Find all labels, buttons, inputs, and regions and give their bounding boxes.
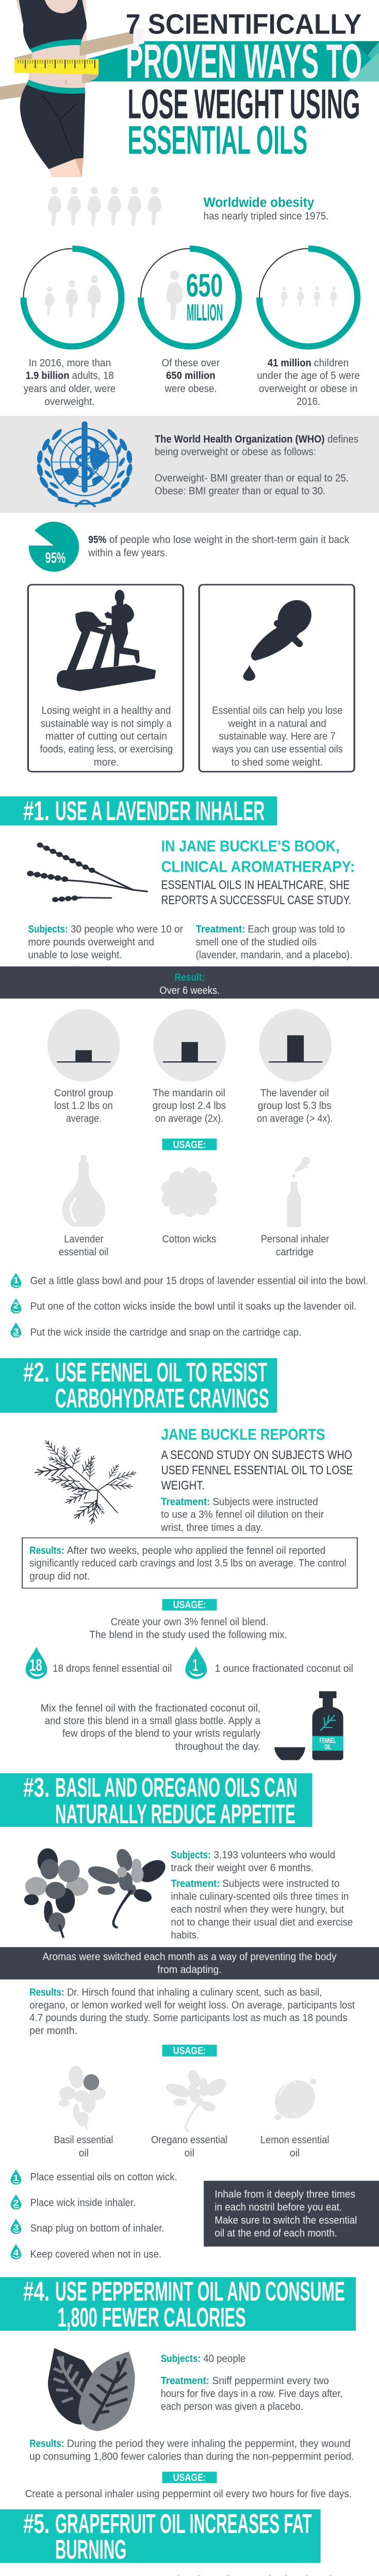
badge: usage: USAGE: xyxy=(173,1599,206,1611)
card text: Losing weight in a healthy and xyxy=(42,704,171,716)
subjects text: Subjects: xyxy=(28,923,68,935)
subjects and treatment text: Sniff peppermint every two xyxy=(212,2375,329,2386)
subjects and treatment text: track their weight over 6 months. xyxy=(171,1862,314,1873)
step 2: 2 xyxy=(13,1301,19,1310)
caption: obese: Of these over xyxy=(162,357,220,369)
subjects and treatment text: Treatment: xyxy=(161,2375,209,2386)
bar chart: control group xyxy=(47,1009,120,1124)
arm and skin xyxy=(15,0,87,94)
treatment text: to use a 3% fennel oil dilution on their xyxy=(161,1509,324,1520)
treatment text: wrist, three times a day. xyxy=(160,1521,263,1533)
caption: children: children xyxy=(314,357,349,369)
item: lemon essential oil: oil xyxy=(290,2147,300,2159)
tank top xyxy=(19,0,87,50)
worldwide obesity text xyxy=(204,195,329,222)
panel: fennel results: Results: xyxy=(29,1545,64,1556)
card text: more. xyxy=(94,756,119,768)
WHO text: defines xyxy=(327,433,358,445)
WHO text: The World Health Organization (WHO) xyxy=(155,433,325,445)
bar chart: lavender group: on average (> 4x). xyxy=(257,1112,333,1124)
treatment text xyxy=(160,1496,324,1533)
caption: obese: 650 million xyxy=(166,369,216,381)
heading banner #1 xyxy=(0,795,277,826)
item: basil essential oil: Basil essential xyxy=(54,2134,113,2146)
heading banner #4: #4. xyxy=(23,2276,50,2307)
caption: children: 2016. xyxy=(296,396,320,408)
caption: obese: were obese. xyxy=(164,383,217,394)
panel: losing weight card xyxy=(28,585,183,772)
bar chart: lavender group xyxy=(257,1009,333,1124)
subjects and treatment text: 40 people xyxy=(203,2352,245,2364)
card text xyxy=(212,704,343,768)
icon: peppermint leaves xyxy=(48,2348,135,2431)
ring chart: 41 million children xyxy=(259,248,357,346)
heading banner #3 xyxy=(0,1772,312,1829)
heading banner #4 xyxy=(0,2276,356,2333)
item: lavender essential oil bottle xyxy=(59,1155,108,1258)
bar chart: lavender group: The lavender oil xyxy=(260,1087,329,1099)
panel: aromas band xyxy=(0,1947,379,1979)
card text xyxy=(40,704,173,768)
caption: obese xyxy=(162,357,220,394)
results text: Results: xyxy=(29,2437,64,2449)
tape lower left xyxy=(0,82,28,100)
subheading: Jane Buckle book xyxy=(161,838,355,907)
icon: basil and oregano xyxy=(24,1848,170,1938)
ingredient: 18 drops fennel: 18 drops fennel essential oil xyxy=(53,1663,172,1674)
bar chart: mandarin group: group lost 2.4 lbs xyxy=(153,1099,226,1111)
item: cotton wicks xyxy=(161,1167,217,1245)
icon: fennel sprig xyxy=(33,1438,138,1524)
ribbon light triangle xyxy=(348,52,379,81)
ribbon mid triangle xyxy=(367,42,379,65)
treatment text: Subjects were instructed xyxy=(212,1496,318,1507)
card text: foods, eating less, or exercising xyxy=(40,743,173,755)
bar chart: control group: Control group xyxy=(54,1087,113,1099)
results text: Results: xyxy=(29,1986,64,1998)
subjects and treatment text: habits. xyxy=(171,1929,199,1941)
step 1: Place essential oils on cotton wick. xyxy=(30,2171,177,2183)
bar chart: mandarin group: on average (2x). xyxy=(155,1112,223,1124)
mixing instructions: few drops of the blend to your wrists regularly xyxy=(62,1727,260,1739)
ingredient: 18 drops fennel xyxy=(26,1647,172,1679)
item: lemon essential oil xyxy=(260,2075,329,2159)
thigh xyxy=(49,159,81,177)
caption: adults xyxy=(24,357,116,408)
thigh shade xyxy=(75,158,84,177)
caption: adults: overweight. xyxy=(44,396,95,408)
subjects and treatment text: Subjects: xyxy=(171,1849,211,1860)
caption: adults: adults, 18 xyxy=(72,369,114,381)
pie chart: 95% xyxy=(29,522,79,572)
badge: usage: USAGE: xyxy=(173,2471,206,2483)
caption: children xyxy=(257,357,360,408)
tape back strap upper xyxy=(14,31,135,61)
step 2 xyxy=(11,2194,136,2210)
statistic text: 95% regain: 95% xyxy=(88,534,106,546)
step 2 xyxy=(11,1298,356,1314)
item: personal inhaler cartridge xyxy=(261,1155,329,1258)
ring chart: 650 million obese: 650 xyxy=(186,267,223,303)
panel: WHO definition xyxy=(0,416,379,513)
panel: inhale callout: oil at the end of each month. xyxy=(215,2227,337,2239)
treatment text xyxy=(196,923,352,961)
treatment text: Each group was told to xyxy=(248,923,345,935)
item: lemon essential oil: Lemon essential xyxy=(260,2134,329,2146)
panel: inhale callout xyxy=(204,2181,379,2247)
subjects text xyxy=(28,923,183,961)
card text: Essential oils can help you lose xyxy=(212,704,342,716)
worldwide obesity text: has nearly tripled since 1975. xyxy=(204,210,329,222)
yellow tape xyxy=(14,59,98,74)
subjects text: 30 people who were 10 or xyxy=(71,923,183,935)
icon: treadmill runner xyxy=(57,590,156,691)
caption: adults: years and older, were xyxy=(24,383,116,394)
results text xyxy=(29,1986,355,2037)
item: personal inhaler cartridge: Personal inhaler xyxy=(261,1233,329,1245)
icon: dropper and drop xyxy=(243,594,318,681)
bar chart: control group: lost 1.2 lbs on xyxy=(54,1099,113,1111)
mixing instructions: Mix the fennel oil with the fractionated coconut oil, xyxy=(41,1702,260,1714)
step 3 xyxy=(11,2218,164,2234)
steps: inhaler xyxy=(11,2169,177,2260)
bar chart: control group: average. xyxy=(66,1112,102,1124)
step 4 xyxy=(11,2244,161,2260)
ingredient: 1 ounce coconut oil xyxy=(186,1647,353,1679)
heading banner #3: #3. xyxy=(23,1772,50,1803)
step 1: 1 xyxy=(13,2174,19,2183)
panel: result band xyxy=(0,967,379,998)
mixing instructions xyxy=(41,1702,261,1752)
item: oregano essential oil: Oregano essential xyxy=(151,2134,227,2146)
fennel blend intro xyxy=(89,1616,287,1640)
step 3: Put the wick inside the cartridge and snap on the cartridge cap. xyxy=(30,1326,302,1338)
fennel blend intro: Create your own 3% fennel oil blend. xyxy=(111,1616,268,1628)
tape ticks xyxy=(25,60,95,68)
step 1 xyxy=(11,2169,177,2184)
panel: essential oils card xyxy=(199,585,354,772)
heading banner #5: BURNING xyxy=(55,2534,126,2565)
card text: weight in a natural and xyxy=(228,718,326,729)
item: oregano essential oil: oil xyxy=(185,2147,194,2159)
tape fine ticks xyxy=(18,60,92,63)
teal ribbon xyxy=(87,41,379,81)
results text xyxy=(29,2437,354,2462)
ribbon dark triangle xyxy=(352,41,379,56)
item: oregano essential oil xyxy=(151,2069,230,2159)
WHO text: Obese: BMI greater than or equal to 30. xyxy=(155,485,325,497)
icon: WHO logo xyxy=(36,421,133,507)
navel xyxy=(65,80,67,84)
panel: inhale callout: in each nostril before you eat. xyxy=(215,2201,342,2213)
lower waistband xyxy=(27,80,85,94)
treatment text: Treatment: xyxy=(161,1496,210,1507)
step 3: 3 xyxy=(13,1327,19,1336)
subjects and treatment text xyxy=(171,1849,353,1941)
subjects and treatment text xyxy=(161,2352,343,2412)
item: lavender essential oil bottle: essential oil xyxy=(59,1246,108,1258)
ring chart: 1.9 billion adults xyxy=(23,248,121,346)
caption: adults: 1.9 billion xyxy=(26,369,70,381)
item: basil essential oil xyxy=(54,2066,113,2159)
steps: lavender inhaler xyxy=(11,1273,368,1338)
worldwide obesity text: Worldwide obesity xyxy=(204,195,315,210)
statistic text: 95% regain xyxy=(88,534,349,558)
bar chart: lavender group: group lost 5.3 lbs xyxy=(258,1099,332,1111)
ingredient: 1 ounce coconut oil: 1 xyxy=(193,1655,198,1674)
subjects text: more pounds overweight and xyxy=(28,936,154,948)
shorts xyxy=(20,84,85,169)
heading banner #5: #5. xyxy=(23,2509,50,2539)
WHO text: being overweight or obese as follows: xyxy=(155,446,316,457)
item: basil essential oil: oil xyxy=(79,2147,89,2159)
item: lavender essential oil bottle: Lavender xyxy=(64,1233,104,1245)
ring chart: 650 million obese xyxy=(141,248,239,346)
subjects text: unable to lose weight. xyxy=(28,949,122,961)
tape tip xyxy=(133,28,144,43)
badge: usage: USAGE: xyxy=(173,1139,206,1150)
caption: adults: In 2016, more than xyxy=(29,357,111,369)
step 3: Snap plug on bottom of inhaler. xyxy=(30,2222,164,2234)
step 2: 2 xyxy=(13,2198,19,2208)
bar chart: mandarin group xyxy=(153,1009,226,1124)
mixing instructions: throughout the day. xyxy=(175,1740,260,1752)
step 3: 3 xyxy=(13,2223,19,2232)
subjects and treatment text: Treatment: xyxy=(171,1877,220,1889)
hero figure: woman's waist with measuring tape xyxy=(0,0,144,177)
panel: result band: Over 6 weeks. xyxy=(159,985,220,996)
ring chart: 650 million obese: MILLION xyxy=(187,299,223,326)
item: cotton wicks: Cotton wicks xyxy=(162,1233,217,1245)
statistic text: 95% regain: within a few years. xyxy=(88,547,168,558)
card text: ways you can use essential oils xyxy=(212,743,343,755)
icon: fennel oil bottle and bowl xyxy=(274,1691,343,1760)
caption: children: overweight or obese in xyxy=(259,383,357,394)
panel: aromas band: from adapting. xyxy=(157,1963,222,1975)
mixing instructions: and store this blend in a small glass bottle. Apply a xyxy=(45,1715,261,1726)
subjects and treatment text: Subjects were instructed to xyxy=(222,1877,340,1889)
treatment text: Treatment: xyxy=(196,923,245,935)
results text: per month. xyxy=(29,2025,77,2037)
panel: fennel results: group did not. xyxy=(29,1570,90,1582)
title banner xyxy=(87,8,379,163)
tape loop right xyxy=(82,73,99,83)
heading banner #5 xyxy=(0,2509,321,2565)
step 3 xyxy=(11,1322,302,1338)
top band xyxy=(30,39,81,53)
treatment text: smell one of the studied oils xyxy=(196,936,317,948)
step 2: Place wick inside inhaler. xyxy=(30,2197,136,2208)
step 4: 4 xyxy=(13,2248,19,2258)
subheading: Jane Buckle reports xyxy=(161,1426,353,1492)
card text: sustainable way is not simply a xyxy=(41,718,172,729)
subheading: Jane Buckle reports: WEIGHT. xyxy=(161,1478,205,1492)
panel: fennel results: After two weeks, people who applied the fennel oil reported xyxy=(67,1545,325,1556)
panel: result band: Result: xyxy=(174,971,205,983)
card text: sustainable way. Here are 7 xyxy=(219,730,336,742)
pie chart: 95%: 95% xyxy=(45,549,66,566)
row of six obese figures icon xyxy=(48,187,161,225)
card text: to shed some weight. xyxy=(232,756,323,768)
subjects and treatment text: 3,193 volunteers who would xyxy=(213,1849,335,1860)
ingredient: 18 drops fennel: 18 xyxy=(29,1655,42,1674)
shorts seam xyxy=(42,96,77,157)
item: personal inhaler cartridge: cartridge xyxy=(276,1246,314,1258)
heading banner #2: #2. xyxy=(23,1357,50,1388)
step 1: 1 xyxy=(13,1276,19,1285)
WHO text xyxy=(155,433,358,497)
badge: usage: USAGE: xyxy=(173,2045,206,2056)
icon: lavender sprigs xyxy=(30,845,147,900)
heading banner #1: #1. xyxy=(23,795,50,826)
heading banner #2 xyxy=(0,1357,277,1414)
bar chart: mandarin group: The mandarin oil xyxy=(153,1087,225,1099)
fennel blend intro: The blend in the study used the following mix. xyxy=(89,1629,287,1640)
subjects and treatment text: Subjects: xyxy=(161,2352,201,2364)
step 4: Keep covered when not in use. xyxy=(30,2248,161,2260)
icon: fennel oil bottle and bowl: OIL xyxy=(324,1743,331,1751)
panel: fennel results xyxy=(22,1538,357,1588)
icon: fennel oil bottle and bowl: FENNEL xyxy=(320,1737,336,1745)
card text: matter of cutting out certain xyxy=(45,730,167,742)
subjects and treatment text: each person was given a placebo. xyxy=(161,2400,303,2412)
caption: children: 41 million xyxy=(268,357,311,369)
